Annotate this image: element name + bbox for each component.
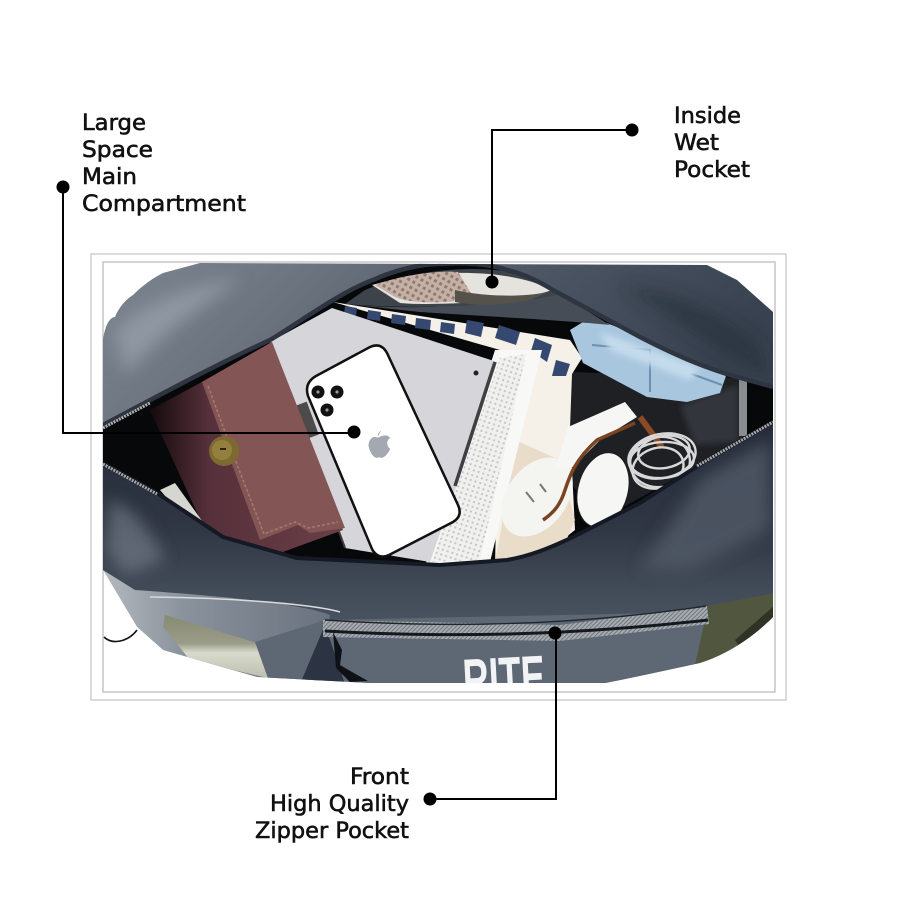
text: large space main compartment: Compartment (82, 191, 246, 217)
bag interior (100, 260, 780, 580)
headphones (502, 402, 664, 536)
stripes (344, 306, 570, 376)
text: large space main compartment (82, 110, 246, 217)
text: large space main compartment: Main (82, 164, 137, 190)
newspaper / notebook (425, 350, 542, 566)
callout: large space main compartment (56, 180, 360, 438)
callout: front zipper pocket (424, 626, 562, 806)
text: front high quality zipper pocket (255, 764, 409, 844)
upper flap (100, 260, 780, 425)
coiled cable (627, 432, 697, 490)
text: front high quality zipper pocket: Zipper Pocket (255, 818, 409, 844)
apple logo (369, 431, 390, 458)
right olive panel (695, 593, 775, 665)
lower bag shading (105, 440, 770, 575)
wallet (150, 342, 345, 553)
upper zipper (103, 263, 773, 425)
text: inside wet pocket: Wet (674, 130, 719, 156)
striped shirt and white fabric (333, 302, 582, 565)
left olive handle (163, 615, 268, 678)
laptop tablet (270, 308, 497, 562)
text: front high quality zipper pocket: High Quality (270, 791, 409, 817)
text: large space main compartment: Large (82, 110, 146, 136)
small drawstring (104, 630, 137, 641)
lower zipper (103, 422, 773, 565)
lower bag body (103, 400, 773, 684)
text: inside wet pocket (674, 103, 750, 183)
text: inside wet pocket: Pocket (674, 157, 750, 183)
text: inside wet pocket: Inside (674, 103, 741, 129)
lower left silver panel (103, 570, 330, 684)
phone cameras (312, 386, 344, 416)
scraps at the bottom left (160, 483, 202, 520)
logo text on the bag: RITE (461, 643, 547, 714)
image frame (91, 254, 786, 700)
jeans (570, 322, 727, 402)
black cloth (570, 372, 744, 506)
photo: open duffel bag (100, 260, 780, 714)
iPhone (307, 345, 460, 557)
callout: inside wet pocket (486, 124, 638, 288)
text: front high quality zipper pocket: Front (350, 764, 409, 790)
front pocket panel (255, 612, 710, 684)
text: large space main compartment: Space (82, 137, 153, 163)
inside pocket (345, 269, 610, 325)
front zipper (323, 606, 709, 682)
upper flap highlights (115, 278, 770, 380)
